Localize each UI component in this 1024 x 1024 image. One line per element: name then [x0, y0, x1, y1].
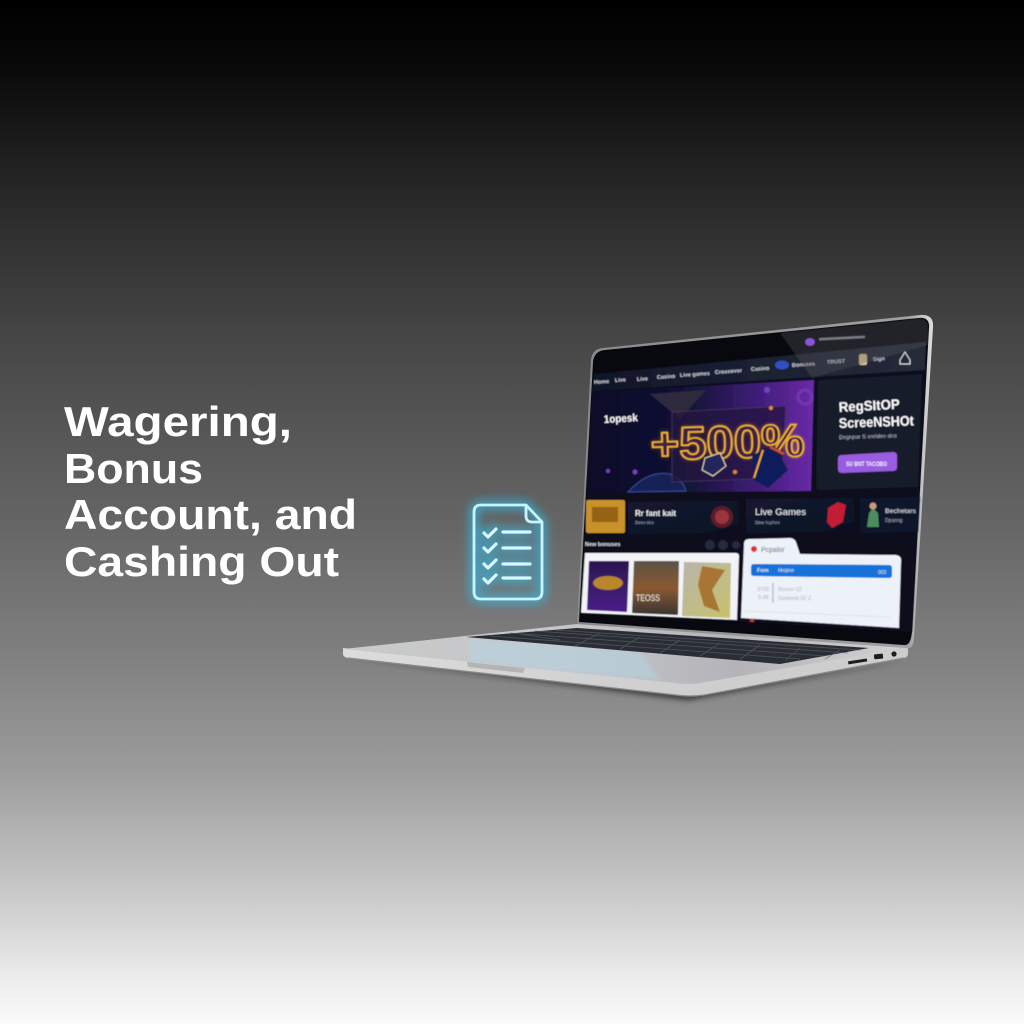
game thumbnail 3: [682, 562, 731, 618]
title: Bonus: [64, 445, 203, 492]
hero logo text: 1opesk: [604, 412, 639, 426]
top navigation bar: Live: [615, 377, 626, 384]
hero banner: [586, 380, 814, 493]
gift and dice: [702, 446, 788, 488]
+500% glow text: +500%: [650, 414, 805, 470]
top navigation bar: Casino: [751, 366, 770, 373]
laptop floor shadow: [352, 658, 905, 700]
laptop lid: [577, 315, 933, 648]
blue bar: Fom: [757, 568, 769, 574]
top navigation bar: Home: [594, 379, 609, 386]
blue bar: 000: [878, 570, 887, 576]
title: Account, and: [64, 491, 357, 538]
promo row: Dine liophes: [755, 520, 781, 525]
title: Cashing Out: [64, 538, 339, 585]
blue bar: [751, 564, 892, 578]
games row heading: [585, 540, 740, 550]
registration side card: Dsgnpar S srelden dos: [839, 433, 897, 441]
popular panel: Bomer 02: [778, 587, 802, 593]
popular panel: [741, 538, 901, 628]
top navigation bar: Sign: [873, 356, 886, 363]
screen display: [580, 319, 928, 632]
laptop: [343, 315, 933, 700]
promo row: Live Games: [755, 507, 806, 518]
popular panel: 0.48: [758, 595, 769, 601]
popular panel: Pcpalor: [761, 547, 785, 554]
top navigation bar: TRUST: [827, 359, 846, 366]
top navigation bar: Live games: [680, 371, 710, 379]
games row heading: New bonuses: [585, 542, 620, 548]
top navigation bar: [592, 342, 926, 391]
top navigation bar: Live: [637, 376, 648, 383]
icon: glowing checklist document: [474, 505, 542, 599]
promo row: [586, 497, 920, 534]
games panel: [581, 553, 739, 620]
popular panel: Dodeetd 02 Z: [778, 596, 812, 602]
title: [64, 398, 357, 585]
registration side card: RegSItOP: [838, 396, 900, 415]
trackpad notch: [467, 662, 525, 673]
ports: [848, 651, 897, 664]
purple button: SU BNT TACOBO: [846, 461, 887, 468]
top navigation bar: Casino: [657, 374, 676, 381]
game thumbnail 2: [632, 561, 679, 615]
popular panel: 3700: [757, 587, 769, 593]
game thumbnail 1: [587, 561, 629, 612]
promo row: Rr fant kait: [635, 509, 676, 518]
blue bar: Hrqine: [778, 568, 794, 574]
top navigation bar: Crossover: [715, 368, 743, 376]
+500% glow text: +500%: [650, 414, 805, 470]
game thumbnail 2: TEOSS: [636, 593, 660, 603]
promo row: Bechetars: [885, 509, 916, 515]
promo row: Dpanng: [885, 518, 903, 524]
registration side card: ScreeNSHOt: [839, 412, 914, 431]
top navigation bar: Bonuses: [792, 361, 815, 369]
title: Wagering,: [64, 398, 292, 445]
laptop base: [343, 624, 908, 696]
camera bar reflection: [780, 319, 928, 378]
screen navy backdrop: [580, 370, 926, 632]
registration side card: [816, 374, 922, 490]
promo row: Deso rice: [635, 520, 655, 525]
keyboard: [466, 628, 869, 664]
